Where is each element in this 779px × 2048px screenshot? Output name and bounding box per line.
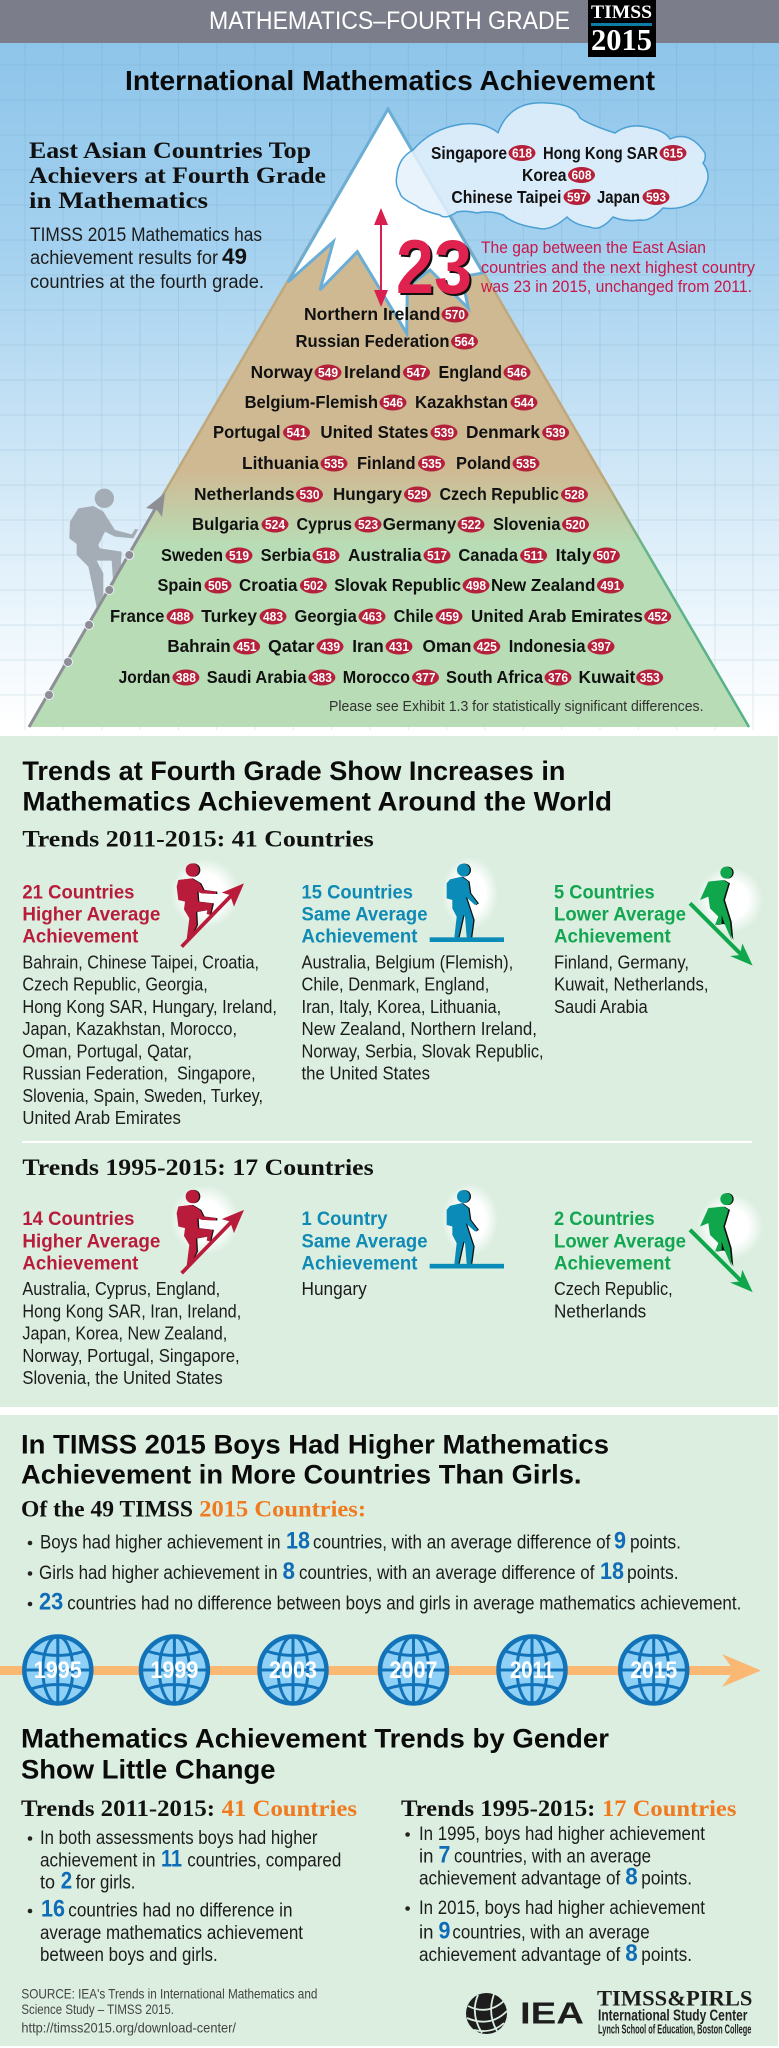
text: 14 countries higher: Achievement bbox=[22, 1252, 139, 1274]
bullet: both assessments bbox=[28, 1828, 341, 1895]
subheading: of the 49 bbox=[21, 1497, 366, 1522]
country row 5: Denmark bbox=[466, 422, 540, 442]
globe: 2003 bbox=[260, 1636, 326, 1704]
text: 14 countries higher: Higher Average bbox=[22, 1230, 161, 1252]
country row 11: 483 bbox=[263, 610, 283, 624]
country row 12: Qatar bbox=[268, 636, 315, 656]
bullet: 2015: 9 bbox=[438, 1918, 450, 1945]
double arrow: gap bbox=[374, 208, 388, 307]
country row 9: Canada bbox=[458, 545, 518, 565]
country row 8: 524 bbox=[265, 518, 285, 532]
cloud with top countries: Japan bbox=[597, 187, 640, 207]
country row 9: Italy bbox=[556, 545, 592, 565]
list: lower countries 1995-2015 bbox=[554, 1279, 673, 1321]
list: higher countries 2011-2015: Czech Republic, Georgia, bbox=[22, 975, 208, 995]
source note bbox=[21, 1985, 317, 2035]
text: 1 country same: Same Average bbox=[302, 1230, 428, 1252]
gap number 23: 23 bbox=[398, 227, 474, 312]
source note: Science Study – TIMSS 2015. bbox=[21, 2001, 174, 2017]
bullet: 16 countries: between boys and girls. bbox=[40, 1945, 218, 1966]
country row 13: 376 bbox=[548, 671, 568, 685]
country row 11: Georgia bbox=[294, 606, 357, 626]
list: lower countries 2011-2015 bbox=[554, 952, 708, 1017]
subheading: gender 1995-2015: Trends 1995-2015: bbox=[401, 1796, 595, 1821]
exhibit note: Please see Exhibit 1.3 for statistically significant differences. bbox=[329, 699, 704, 715]
country row 4 bbox=[245, 392, 538, 412]
bullet: 16 countries: average mathematics achievement bbox=[40, 1923, 304, 1944]
country row 13: 377 bbox=[416, 671, 436, 685]
text: 5 countries lower: Achievement bbox=[554, 926, 671, 948]
bullet: no difference: 23 bbox=[39, 1588, 63, 1615]
icon: grey climber bbox=[69, 489, 138, 607]
list: same countries 2011-2015: Australia, Belgium (Flemish), bbox=[302, 952, 513, 972]
heading: trends: Trends at Fourth Grade Show Increases in bbox=[22, 756, 565, 786]
country row 13: 388 bbox=[176, 671, 196, 685]
cloud with top countries: Korea bbox=[522, 165, 567, 185]
country row 10: Slovak Republic bbox=[334, 575, 461, 595]
country row 12: 397 bbox=[591, 640, 611, 654]
bullet: both assessments: countries, compared bbox=[187, 1851, 341, 1872]
bullet: 2015 bbox=[405, 1898, 706, 1967]
text: 21 countries higher: Achievement bbox=[22, 926, 139, 948]
country row 11: 452 bbox=[648, 610, 668, 624]
country row 5: United States bbox=[320, 422, 429, 442]
list: same countries 2011-2015: Chile, Denmark, England, bbox=[302, 975, 489, 995]
cloud with top countries: Chinese Taipei bbox=[451, 187, 561, 207]
bullet: both assessments: for girls. bbox=[76, 1873, 136, 1894]
subheading: trends 2011-2015: Trends 2011-2015: 41 Countries bbox=[22, 827, 374, 852]
country row 3: 546 bbox=[507, 366, 527, 380]
bullet: 16 countries bbox=[28, 1896, 304, 1966]
panel: trends bbox=[0, 736, 778, 1407]
country row 7: Czech Republic bbox=[440, 484, 559, 504]
subheading: gender 2011-2015: Trends 2011-2015: bbox=[21, 1796, 215, 1821]
country row 13 bbox=[119, 667, 663, 687]
country row 6: Lithuania bbox=[242, 453, 319, 473]
subheading: gender 1995-2015: 17 Countries bbox=[602, 1796, 736, 1821]
subheading: trends 1995-2015: Trends 1995-2015: 17 Countries bbox=[22, 1155, 374, 1180]
intro text: countries at the fourth grade. bbox=[30, 272, 264, 293]
icon: green descender 2011-2015 bbox=[690, 867, 763, 966]
logo: TIMSS and PIRLS: TIMSS&PIRLS bbox=[597, 1986, 752, 2011]
country row 9: Serbia bbox=[261, 545, 311, 565]
country row 6 bbox=[242, 453, 540, 473]
bullet: 1995: achievement advantage of bbox=[419, 1869, 621, 1890]
country row 9: Australia bbox=[348, 545, 422, 565]
list: lower countries 2011-2015: Saudi Arabia bbox=[554, 997, 649, 1017]
list: lower countries 2011-2015: Finland, Germany, bbox=[554, 952, 689, 972]
text: 21 countries higher: 21 Countries bbox=[22, 881, 135, 903]
list: higher countries 1995-2015: Slovenia, the United States bbox=[22, 1368, 223, 1388]
bullet: girls: 18 bbox=[600, 1558, 624, 1585]
TIMSS 2015 badge bbox=[588, 0, 656, 57]
country row 9: 511 bbox=[524, 549, 544, 563]
country row 9: 518 bbox=[316, 549, 336, 563]
country row 8: Bulgaria bbox=[192, 514, 259, 534]
globe: 2011: 2011 bbox=[510, 1657, 554, 1684]
globe: 1999: 1999 bbox=[150, 1657, 198, 1684]
timeline arrow bbox=[0, 1654, 761, 1687]
bullet: 16 countries: countries had no difference in bbox=[68, 1901, 292, 1922]
country row 13: 353 bbox=[640, 671, 660, 685]
country row 3: 549 bbox=[318, 366, 338, 380]
header title: MATHEMATICS–FOURTH GRADE bbox=[209, 7, 570, 35]
cloud with top countries: 608 bbox=[572, 168, 592, 182]
list: higher countries 2011-2015: Slovenia, Spain, Sweden, Turkey, bbox=[22, 1086, 263, 1106]
country row 2: Russian Federation bbox=[296, 331, 450, 351]
icon: blue walker 2011-2015 bbox=[430, 857, 504, 942]
bullet: both assessments: to bbox=[40, 1873, 55, 1894]
list: same countries 2011-2015: New Zealand, Northern Ireland, bbox=[302, 1019, 537, 1039]
list: lower countries 1995-2015: Netherlands bbox=[554, 1301, 646, 1321]
list: same countries 2011-2015: Norway, Serbia, Slovak Republic, bbox=[302, 1041, 544, 1061]
icon: green descender 1995-2015 bbox=[690, 1193, 763, 1292]
list: higher countries 1995-2015: Australia, Cyprus, England, bbox=[22, 1279, 220, 1299]
country row 13: Morocco bbox=[343, 667, 410, 687]
cloud with top countries: 615 bbox=[663, 146, 683, 160]
country row 1: Northern Ireland bbox=[304, 304, 440, 324]
list: higher countries 1995-2015: Norway, Portugal, Singapore, bbox=[22, 1346, 240, 1366]
country row 3: Norway bbox=[251, 362, 313, 382]
subheading: gender 2011-2015 bbox=[21, 1796, 357, 1821]
country row 8: Cyprus bbox=[296, 514, 352, 534]
heading: East Asian countries: East Asian Countries Top bbox=[29, 138, 311, 163]
logo: IEA text: IEA bbox=[520, 1995, 584, 2030]
country row 9: 507 bbox=[596, 549, 616, 563]
country row 11: 488 bbox=[170, 610, 190, 624]
heading: trends by gender: Show Little Change bbox=[21, 1754, 276, 1784]
globe: 2015 bbox=[620, 1636, 687, 1704]
country row 12: Oman bbox=[422, 636, 471, 656]
text: 1 country same: 1 Country bbox=[302, 1208, 388, 1230]
bullet: 1995: in bbox=[419, 1846, 434, 1867]
cloud with top countries bbox=[396, 103, 708, 229]
TIMSS 2015 badge: 2015 bbox=[591, 22, 652, 57]
intro text: 49 bbox=[222, 244, 247, 269]
country row 11: France bbox=[110, 606, 165, 626]
list: higher countries 2011-2015: Japan, Kazakhstan, Morocco, bbox=[22, 1019, 237, 1039]
text: 15 countries same bbox=[302, 881, 428, 948]
list: same countries 2011-2015 bbox=[302, 952, 544, 1084]
country row 10: 491 bbox=[600, 579, 620, 593]
globe: 2007: 2007 bbox=[390, 1657, 438, 1684]
gap explanation: was 23 in 2015, unchanged from 2011. bbox=[480, 277, 752, 296]
country row 13: Kuwait bbox=[578, 667, 635, 687]
globe: 2003: 2003 bbox=[269, 1657, 317, 1684]
bullet: 1995: countries, with an average bbox=[454, 1846, 651, 1867]
mountain bbox=[29, 109, 749, 727]
country row 9 bbox=[161, 545, 620, 565]
list: higher countries 1995-2015: Japan, Korea, New Zealand, bbox=[22, 1324, 227, 1344]
icon: red climber 1995-2015 bbox=[170, 1185, 244, 1273]
text: 2 countries lower: Achievement bbox=[554, 1252, 671, 1274]
globe: 1995 bbox=[24, 1636, 91, 1704]
icon: blue walker 1995-2015 bbox=[430, 1183, 504, 1268]
country row 9: 519 bbox=[229, 549, 249, 563]
cloud with top countries: 593 bbox=[646, 190, 666, 204]
country row 2: 564 bbox=[454, 335, 475, 349]
country row 11: 463 bbox=[362, 610, 382, 624]
list: higher countries 2011-2015: Hong Kong SAR, Hungary, Ireland, bbox=[22, 997, 277, 1017]
text: 15 countries same: Achievement bbox=[302, 926, 418, 948]
country row 9: Sweden bbox=[161, 545, 223, 565]
country row 7: 530 bbox=[300, 488, 320, 502]
panel: gender bbox=[0, 1415, 778, 2046]
intro text: TIMSS 2015 Mathematics has bbox=[30, 225, 262, 246]
country row 11: United Arab Emirates bbox=[471, 606, 643, 626]
country row 8: 522 bbox=[461, 518, 481, 532]
logo: IEA globe bbox=[466, 1993, 507, 2034]
country row 12: Bahrain bbox=[167, 636, 231, 656]
country row 3: Ireland bbox=[344, 362, 401, 382]
bullet: girls: Girls had higher achievement in bbox=[39, 1563, 278, 1584]
country row 13: Jordan bbox=[119, 667, 170, 687]
subheading: gender 2011-2015: 41 Countries bbox=[222, 1796, 357, 1821]
list: higher countries 2011-2015: Oman, Portugal, Qatar, bbox=[22, 1041, 192, 1061]
text: 1 country same: Achievement bbox=[302, 1252, 418, 1274]
bullet: girls: points. bbox=[627, 1563, 679, 1584]
heading: boys vs girls: In TIMSS 2015 Boys Had Higher Mathematics bbox=[21, 1429, 609, 1459]
bullet: both assessments: 2 bbox=[61, 1868, 72, 1895]
heading: trends bbox=[22, 756, 612, 817]
country row 12 bbox=[167, 636, 614, 656]
country row 10: 498 bbox=[466, 579, 486, 593]
list: higher countries 1995-2015 bbox=[22, 1279, 241, 1388]
gap explanation bbox=[480, 238, 755, 296]
bullet: boys: 9 bbox=[614, 1527, 626, 1554]
icon: red climber 2011-2015 bbox=[170, 858, 244, 947]
text: 5 countries lower: 5 Countries bbox=[554, 881, 655, 903]
globe: 1995: 1995 bbox=[34, 1657, 82, 1684]
country row 10: New Zealand bbox=[491, 575, 595, 595]
country row 3: 547 bbox=[406, 366, 427, 380]
bullet: 16 countries: 16 bbox=[41, 1896, 65, 1923]
country row 3: England bbox=[438, 362, 502, 382]
country row 5: 539 bbox=[434, 426, 454, 440]
icon: climbing rope arrow bbox=[29, 493, 165, 727]
country row 5: 539 bbox=[546, 426, 566, 440]
globe: 2015: 2015 bbox=[630, 1657, 677, 1684]
country row 8: Slovenia bbox=[493, 514, 561, 534]
bullet: 1995: points. bbox=[641, 1869, 692, 1890]
bullet: girls bbox=[28, 1558, 679, 1585]
bullet: 1995: 7 bbox=[438, 1841, 450, 1868]
list: lower countries 2011-2015: Kuwait, Netherlands, bbox=[554, 975, 708, 995]
bullet: boys bbox=[28, 1527, 681, 1554]
cloud with top countries: 618 bbox=[512, 146, 532, 160]
list: higher countries 2011-2015: United Arab Emirates bbox=[22, 1108, 181, 1128]
heading: trends: Mathematics Achievement Around the World bbox=[22, 787, 612, 817]
text: 1 country same bbox=[302, 1208, 428, 1274]
text: 15 countries same: Same Average bbox=[302, 904, 428, 926]
bullet: both assessments: achievement in bbox=[40, 1851, 156, 1872]
cloud with top countries: 597 bbox=[567, 190, 587, 204]
country row 3 bbox=[251, 362, 530, 382]
country row 13: 383 bbox=[312, 671, 332, 685]
text: 21 countries higher: Higher Average bbox=[22, 904, 161, 926]
country row 4: Kazakhstan bbox=[415, 392, 508, 412]
bullet: boys: countries, with an average difference of bbox=[313, 1532, 611, 1553]
country row 8 bbox=[192, 514, 589, 534]
subheading: gender 1995-2015 bbox=[401, 1796, 736, 1821]
heading: East Asian countries bbox=[29, 138, 326, 213]
cloud with top countries: Singapore bbox=[431, 143, 507, 163]
intro text bbox=[30, 225, 264, 293]
text: 21 countries higher bbox=[22, 881, 161, 948]
country row 8: Germany bbox=[383, 514, 457, 534]
country row 6: 535 bbox=[324, 457, 344, 471]
list: same countries 2011-2015: Iran, Italy, Korea, Lithuania, bbox=[302, 997, 501, 1017]
list: higher countries 2011-2015: Bahrain, Chinese Taipei, Croatia, bbox=[22, 952, 259, 972]
text: 15 countries same: 15 Countries bbox=[302, 881, 413, 903]
country row 10: Croatia bbox=[239, 575, 298, 595]
text: 2 countries lower: Lower Average bbox=[554, 1230, 686, 1252]
country row 10: 502 bbox=[303, 579, 323, 593]
bullet: both assessments: In both assessments boys had higher bbox=[40, 1828, 318, 1849]
bullet: boys: points. bbox=[630, 1532, 681, 1553]
country row 12: 431 bbox=[389, 640, 409, 654]
country row 7 bbox=[194, 484, 588, 504]
text: 2 countries lower: 2 Countries bbox=[554, 1208, 655, 1230]
source note: SOURCE: IEA's Trends in International Mathematics and bbox=[21, 1985, 317, 2001]
list: higher countries 2011-2015 bbox=[22, 952, 277, 1128]
bullet: 2015: points. bbox=[641, 1945, 692, 1966]
country row 7: Hungary bbox=[333, 484, 402, 504]
country row 8: 520 bbox=[566, 518, 586, 532]
text: 2 countries lower bbox=[554, 1208, 686, 1274]
country row 5 bbox=[213, 422, 569, 442]
country row 6: Finland bbox=[357, 453, 416, 473]
gap number 23: 23 bbox=[396, 225, 472, 310]
country row 1: 570 bbox=[445, 308, 465, 322]
gap explanation: countries and the next highest country bbox=[481, 258, 755, 277]
text: 14 countries higher: 14 Countries bbox=[22, 1208, 135, 1230]
list: higher countries 2011-2015: Russian Federation, Singapore, bbox=[22, 1064, 256, 1084]
country row 10 bbox=[158, 575, 624, 595]
country row 6: 535 bbox=[516, 457, 536, 471]
country row 9: 517 bbox=[427, 549, 447, 563]
globe: 2007 bbox=[380, 1636, 447, 1704]
header bar bbox=[0, 0, 779, 43]
country row 10: 505 bbox=[208, 579, 228, 593]
country row 7: 528 bbox=[564, 488, 585, 502]
main title: International Mathematics Achievement bbox=[125, 65, 655, 96]
country row 6: Poland bbox=[456, 453, 511, 473]
country row 12: Iran bbox=[352, 636, 384, 656]
heading: East Asian countries: Achievers at Fourth Grade bbox=[29, 163, 326, 188]
country row 7: 529 bbox=[408, 488, 428, 502]
list: higher countries 1995-2015: Hong Kong SAR, Iran, Ireland, bbox=[22, 1301, 241, 1321]
country row 11 bbox=[110, 606, 671, 626]
bullet: 1995: In 1995, boys had higher achievement bbox=[419, 1824, 706, 1845]
country row 7: Netherlands bbox=[194, 484, 295, 504]
bullet: 1995 bbox=[405, 1824, 706, 1891]
subheading: of the 49: Of the 49 TIMSS bbox=[21, 1497, 193, 1522]
bullet: both assessments: 11 bbox=[161, 1846, 182, 1873]
bullet: 2015: achievement advantage of bbox=[419, 1945, 621, 1966]
list: same countries 1995-2015: Hungary bbox=[302, 1279, 367, 1299]
heading: boys vs girls: Achievement in More Countries Than Girls. bbox=[21, 1459, 582, 1489]
heading: boys vs girls bbox=[21, 1429, 609, 1489]
country row 12: 451 bbox=[237, 640, 257, 654]
country row 12: 439 bbox=[320, 640, 340, 654]
gap explanation: The gap between the East Asian bbox=[481, 238, 706, 257]
country row 4: 544 bbox=[514, 396, 534, 410]
country row 11: Turkey bbox=[201, 606, 257, 626]
country row 13: Saudi Arabia bbox=[207, 667, 307, 687]
globe: 1999 bbox=[141, 1636, 208, 1704]
country row 12: Indonesia bbox=[509, 636, 586, 656]
country row 4: 546 bbox=[383, 396, 403, 410]
text: 5 countries lower: Lower Average bbox=[554, 904, 686, 926]
country row 10: Spain bbox=[158, 575, 202, 595]
text: 14 countries higher bbox=[22, 1208, 161, 1274]
TIMSS 2015 badge: TIMSS bbox=[591, 2, 652, 23]
country row 13: South Africa bbox=[446, 667, 543, 687]
country row 5: 541 bbox=[286, 426, 307, 440]
country row 11: Chile bbox=[394, 606, 434, 626]
bullet: 2015: In 2015, boys had higher achievement bbox=[419, 1898, 706, 1919]
source note: http://timss2015.org/download-center/ bbox=[21, 2019, 236, 2035]
country row 5: Portugal bbox=[213, 422, 280, 442]
subheading: of the 49: 2015 Countries: bbox=[199, 1497, 366, 1522]
bullet: girls: countries, with an average difference of bbox=[299, 1563, 595, 1584]
country row 6: 535 bbox=[422, 457, 442, 471]
logo: TIMSS and PIRLS bbox=[597, 1986, 752, 2036]
bullet: 2015: in bbox=[419, 1923, 434, 1944]
intro text: achievement results for bbox=[30, 248, 219, 269]
heading: trends by gender bbox=[21, 1723, 609, 1784]
bullet: boys: 18 bbox=[286, 1527, 310, 1554]
sky background bbox=[0, 43, 779, 733]
bullet: boys: Boys had higher achievement in bbox=[40, 1532, 280, 1553]
bullet: girls: 8 bbox=[282, 1558, 295, 1585]
bullet: 1995: 8 bbox=[625, 1864, 638, 1891]
bullet: 2015: 8 bbox=[625, 1940, 638, 1967]
snow cap bbox=[288, 109, 483, 333]
country row 4: Belgium-Flemish bbox=[245, 392, 378, 412]
text: 5 countries lower bbox=[554, 881, 686, 948]
bullet: 2015: countries, with an average bbox=[452, 1923, 650, 1944]
heading: trends by gender: Mathematics Achievement Trends by Gender bbox=[21, 1723, 609, 1753]
country row 8: 523 bbox=[358, 518, 378, 532]
globe: 2011 bbox=[498, 1636, 566, 1704]
heading: East Asian countries: in Mathematics bbox=[29, 188, 208, 213]
cloud with top countries: Hong Kong SAR bbox=[543, 143, 658, 163]
country row 11: 459 bbox=[439, 610, 459, 624]
list: same countries 2011-2015: the United States bbox=[302, 1064, 430, 1084]
country row 12: 425 bbox=[477, 640, 497, 654]
list: lower countries 1995-2015: Czech Republic, bbox=[554, 1279, 673, 1299]
